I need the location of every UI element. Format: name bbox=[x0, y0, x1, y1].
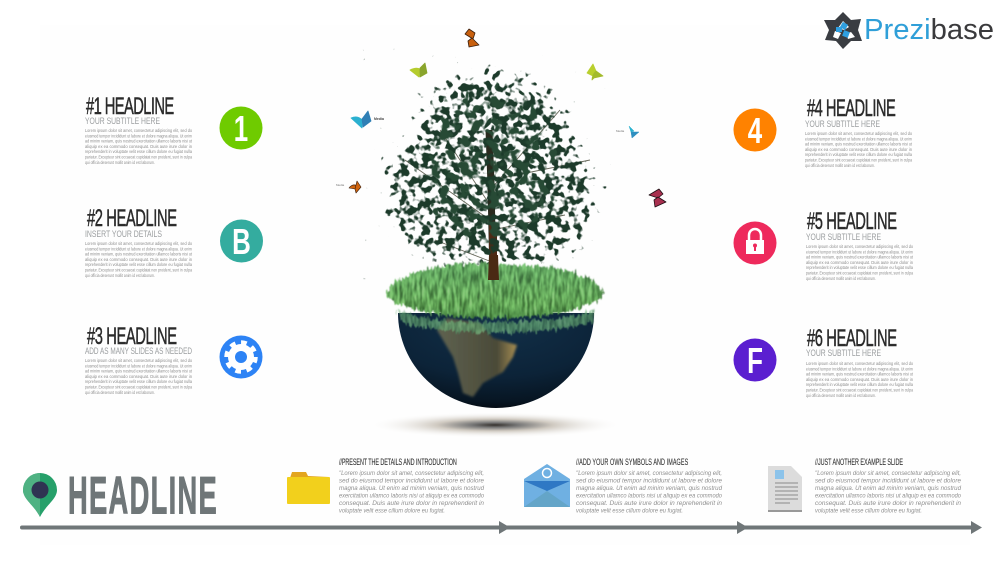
panel: item 5 bbox=[734, 208, 914, 281]
body text: pariatur. Excepteur sint occaecat cupidatat non proident, sunt in culpa bbox=[85, 384, 192, 390]
text block: example slide: exercitation ullamco laboris nisi ut aliquip ex ea commodo bbox=[815, 492, 961, 500]
icon: number 4 bbox=[734, 108, 776, 152]
body text: ad minim veniam, quis nostrud exercitation ullamco laboris nisi ut bbox=[85, 252, 193, 257]
body text: ad minim veniam, quis nostrud exercitation ullamco laboris nisi ut bbox=[806, 255, 914, 260]
text block: example slide: voluptate velit esse cillum dolore eu fugiat. bbox=[815, 508, 922, 514]
text block: example slide: magna aliqua. Ut enim ad minim veniam, quis nostrud bbox=[815, 485, 961, 492]
body text: aliquip ex ea commodo consequat. Duis aute irure dolor in bbox=[805, 147, 913, 152]
South America landmass bbox=[437, 318, 517, 397]
body text: aliquip ex ea commodo consequat. Duis aute irure dolor in bbox=[806, 260, 914, 265]
butterfly: cyan right bbox=[629, 126, 639, 138]
body text: eiusmod tempor incididunt ut labore et dolore magna aliqua. Ut enim bbox=[85, 246, 192, 251]
ground shadow bbox=[367, 412, 623, 438]
icon: number 1: 1 bbox=[234, 109, 248, 149]
text block: own symbols bbox=[576, 457, 722, 514]
icon: envelope bbox=[524, 464, 570, 507]
icon: letter F: F bbox=[747, 341, 763, 381]
logo: Prezibase bbox=[824, 12, 994, 49]
text block: example slide: sed do eiusmod tempor incididunt ut labore et dolore bbox=[815, 478, 961, 484]
body text: ad minim veniam, quis nostrud exercitation ullamco laboris nisi ut bbox=[85, 369, 193, 374]
heading: #5 HEADLINE bbox=[807, 208, 897, 235]
text block: present the details: voluptate velit esse cillum dolore eu fugiat. bbox=[339, 508, 445, 514]
icon: letter B: B bbox=[232, 222, 251, 262]
text block: present the details: exercitation ullamco laboris nisi ut aliquip ex ea commodo bbox=[339, 492, 484, 500]
globe hemisphere bbox=[398, 313, 594, 408]
icon: number 1 bbox=[220, 106, 262, 150]
tree branches and trunk bbox=[405, 110, 590, 280]
timeline arrow bbox=[20, 521, 982, 534]
subtitle: YOUR SUBTITLE HERE bbox=[805, 119, 880, 129]
text block: present the details: consequat. Duis aute irure dolor in reprehenderit in bbox=[339, 500, 484, 507]
heading: #1 HEADLINE bbox=[86, 93, 174, 120]
text block: present the details: //PRESENT THE DETAILS AND INTRODUCTION bbox=[339, 457, 457, 467]
text block: example slide: consequat. Duis aute irure dolor in reprehenderit in bbox=[815, 500, 961, 507]
body text: Lorem ipsum dolor sit amet, consectetur adipiscing elit, sed do bbox=[805, 131, 913, 136]
panel: item 6 bbox=[734, 325, 914, 398]
text block: own symbols: magna aliqua. Ut enim ad minim veniam, quis nostrud bbox=[576, 485, 722, 492]
body text: aliquip ex ea commodo consequat. Duis aute irure dolor in bbox=[85, 374, 193, 379]
icon: padlock bbox=[734, 222, 776, 264]
body text: aliquip ex ea commodo consequat. Duis aute irure dolor in bbox=[85, 257, 193, 262]
body text: ad minim veniam, quis nostrud exercitation ullamco laboris nisi ut bbox=[806, 372, 914, 377]
body text: Lorem ipsum dolor sit amet, consectetur adipiscing elit, sed do bbox=[806, 361, 914, 366]
icon: gear bbox=[220, 336, 262, 378]
body text: pariatur. Excepteur sint occaecat cupidatat non proident, sunt in culpa bbox=[806, 388, 913, 392]
panel: item 2 bbox=[85, 205, 263, 278]
text block: own symbols: exercitation ullamco laboris nisi ut aliquip ex ea commodo bbox=[576, 492, 722, 500]
body text: qui officia deserunt mollit anim id est laborum. bbox=[806, 393, 876, 398]
body text: reprehenderit in voluptate velit esse cillum dolore eu fugiat nulla bbox=[806, 382, 914, 387]
body text: eiusmod tempor incididunt ut labore et dolore magna aliqua. Ut enim bbox=[806, 366, 913, 371]
body text: eiusmod tempor incididunt ut labore et dolore magna aliqua. Ut enim bbox=[805, 136, 912, 141]
body text: ad minim veniam, quis nostrud exercitation ullamco laboris nisi ut bbox=[805, 142, 913, 147]
butterfly: red bbox=[649, 189, 666, 207]
body text: reprehenderit in voluptate velit esse cillum dolore eu fugiat nulla bbox=[805, 152, 913, 157]
icon: logo star bbox=[824, 12, 862, 49]
body text: qui officia deserunt mollit anim id est laborum. bbox=[85, 390, 155, 395]
butterfly: cyan left bbox=[351, 111, 371, 128]
tree foliage bbox=[383, 70, 595, 268]
text block: present the details: sed do eiusmod tempor incididunt ut labore et dolore bbox=[339, 478, 484, 484]
body text: Lorem ipsum dolor sit amet, consectetur adipiscing elit, sed do bbox=[85, 241, 193, 246]
subtitle: ADD AS MANY SLIDES AS NEEDED bbox=[85, 346, 192, 356]
central illustration: tree on globe bbox=[336, 29, 666, 438]
body text bbox=[806, 361, 914, 398]
panel: item 3 bbox=[85, 323, 262, 395]
body text: qui officia deserunt mollit anim id est laborum. bbox=[85, 273, 155, 278]
body text: qui officia deserunt mollit anim id est laborum. bbox=[805, 163, 875, 168]
heading: #2 HEADLINE bbox=[87, 205, 177, 232]
butterfly: orange small bbox=[349, 181, 361, 193]
subtitle: YOUR SUBTITLE HERE bbox=[806, 348, 881, 358]
body text: ad minim veniam, quis nostrud exercitation ullamco laboris nisi ut bbox=[85, 139, 193, 144]
icon: letter B bbox=[220, 220, 263, 262]
body text: aliquip ex ea commodo consequat. Duis aute irure dolor in bbox=[85, 144, 193, 149]
butterfly: orange top bbox=[465, 29, 479, 47]
body text: reprehenderit in voluptate velit esse cillum dolore eu fugiat nulla bbox=[85, 379, 193, 384]
body text: pariatur. Excepteur sint occaecat cupidatat non proident, sunt in culpa bbox=[85, 268, 192, 272]
body text: aliquip ex ea commodo consequat. Duis aute irure dolor in bbox=[806, 377, 914, 382]
icon: number 4: 4 bbox=[748, 111, 763, 151]
text block: example slide: //JUST ANOTHER EXAMPLE SLIDE bbox=[815, 457, 903, 467]
body text: Lorem ipsum dolor sit amet, consectetur adipiscing elit, sed do bbox=[85, 128, 193, 133]
heading: #6 HEADLINE bbox=[807, 325, 897, 352]
text block: present the details bbox=[339, 457, 484, 514]
icon: folder bbox=[287, 472, 330, 504]
text block: present the details: "Lorem ipsum dolor sit amet, consectetur adipiscing elit, bbox=[339, 470, 484, 477]
icon: letter F bbox=[734, 338, 776, 382]
body text bbox=[806, 244, 914, 281]
trunk base bbox=[488, 255, 499, 280]
butterfly: yellow right bbox=[587, 64, 603, 80]
body text bbox=[85, 358, 193, 395]
heading: #4 HEADLINE bbox=[807, 95, 896, 122]
body text: qui officia deserunt mollit anim id est laborum. bbox=[806, 276, 876, 281]
subtitle: YOUR SUBTITLE HERE bbox=[806, 232, 881, 242]
body text: pariatur. Excepteur sint occaecat cupidatat non proident, sunt in culpa bbox=[85, 154, 192, 160]
subtitle: YOUR SUBTITLE HERE bbox=[85, 116, 160, 126]
subtitle: INSERT YOUR DETAILS bbox=[85, 229, 162, 239]
panel: item 4 bbox=[734, 95, 913, 168]
body text: eiusmod tempor incididunt ut labore et dolore magna aliqua. Ut enim bbox=[85, 133, 192, 138]
location pin bbox=[23, 473, 57, 517]
body text bbox=[85, 128, 193, 165]
body text: reprehenderit in voluptate velit esse cillum dolore eu fugiat nulla bbox=[85, 149, 193, 154]
body text: qui officia deserunt mollit anim id est laborum. bbox=[85, 160, 155, 165]
butterfly: yellow left bbox=[410, 63, 427, 77]
text block: example slide: "Lorem ipsum dolor sit amet, consectetur adipiscing elit, bbox=[815, 470, 961, 477]
main headline: HEADLINE bbox=[68, 466, 217, 525]
text block: own symbols: consequat. Duis aute irure dolor in reprehenderit in bbox=[576, 500, 722, 507]
text block: example slide bbox=[815, 457, 961, 514]
butterfly label: Media bbox=[374, 117, 384, 121]
body text: reprehenderit in voluptate velit esse cillum dolore eu fugiat nulla bbox=[85, 262, 193, 267]
body text: pariatur. Excepteur sint occaecat cupidatat non proident, sunt in culpa bbox=[806, 270, 913, 276]
body text: eiusmod tempor incididunt ut labore et dolore magna aliqua. Ut enim bbox=[806, 249, 913, 254]
butterfly label: Media bbox=[616, 129, 625, 133]
text block: own symbols: "Lorem ipsum dolor sit amet, consectetur adipiscing elit, bbox=[576, 470, 722, 477]
butterflies bbox=[336, 29, 666, 207]
body text: pariatur. Excepteur sint occaecat cupidatat non proident, sunt in culpa bbox=[805, 158, 912, 162]
logo wordmark: Prezibase bbox=[864, 14, 994, 46]
icon: document bbox=[768, 466, 802, 512]
panel: item 1 bbox=[85, 93, 262, 165]
butterfly label: Media bbox=[336, 183, 345, 187]
grass disc bbox=[387, 264, 602, 332]
text block: own symbols: voluptate velit esse cillum dolore eu fugiat. bbox=[576, 508, 683, 514]
body text: Lorem ipsum dolor sit amet, consectetur adipiscing elit, sed do bbox=[806, 244, 914, 249]
text block: present the details: magna aliqua. Ut enim ad minim veniam, quis nostrud bbox=[339, 485, 484, 492]
body text: reprehenderit in voluptate velit esse cillum dolore eu fugiat nulla bbox=[806, 265, 914, 270]
body text: eiusmod tempor incididunt ut labore et dolore magna aliqua. Ut enim bbox=[85, 363, 192, 368]
text block: own symbols: sed do eiusmod tempor incididunt ut labore et dolore bbox=[576, 478, 722, 484]
body text bbox=[805, 131, 913, 168]
text block: own symbols: //ADD YOUR OWN SYMBOLS AND IMAGES bbox=[576, 457, 688, 467]
heading: #3 HEADLINE bbox=[87, 323, 177, 350]
body text: Lorem ipsum dolor sit amet, consectetur adipiscing elit, sed do bbox=[85, 358, 193, 363]
body text bbox=[85, 241, 193, 278]
